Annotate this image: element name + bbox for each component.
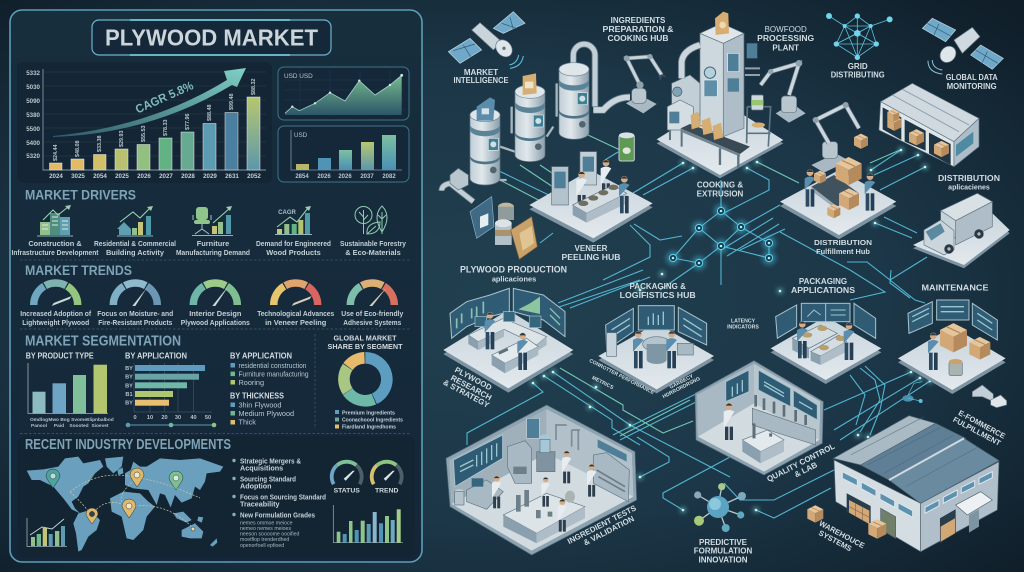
label: ingredients hub: COOKING HUB xyxy=(608,34,669,43)
bar chart: market size with CAGR: $78.33 xyxy=(163,120,169,136)
label: predictive formulation innovation xyxy=(694,538,752,565)
bar chart: market size with CAGR: $33.38 xyxy=(97,136,103,152)
bar chart: market size with CAGR: 2025 xyxy=(115,173,129,180)
list: recent developments: Strategic Mergers & xyxy=(240,456,301,465)
label: plywood production: aplicaciones xyxy=(492,275,536,284)
chart: global market share donut: Premium Ingredients xyxy=(342,410,395,416)
gauge: lightweight plywood: Increased Adoption of xyxy=(20,309,92,318)
chart: by product type: BY PRODUCT TYPE xyxy=(26,351,94,360)
label: cooking and extrusion: EXTRUSION xyxy=(697,190,744,199)
list: recent developments xyxy=(232,456,326,549)
label: plywood research and strategy: RESEARCH xyxy=(449,373,493,402)
driver: furniture manufacturing: Manufacturing Demand xyxy=(176,248,250,257)
gauge: moisture and fire resistant xyxy=(97,283,174,327)
icon: small link node xyxy=(902,382,923,403)
chart: USD area xyxy=(278,67,409,120)
gauge: interior design: Interior Design xyxy=(189,309,242,318)
bar chart: market size with CAGR: 2027 xyxy=(159,173,173,180)
label: plywood research and strategy: PLYWOOD xyxy=(453,365,493,392)
list: recent developments: Sourcing Standard xyxy=(240,474,296,483)
label: cooking and extrusion xyxy=(697,181,744,199)
label: maintenance: MAINTENANCE xyxy=(922,284,989,293)
driver: sustainable forestry xyxy=(340,206,407,257)
chart: by product type xyxy=(26,351,114,429)
bar chart: market size with CAGR: $88.32 xyxy=(251,78,257,95)
label: latency indicators: INDICATORS xyxy=(727,324,759,330)
bar chart: market size with CAGR: 2028 xyxy=(181,173,195,180)
label: veneer peeling hub: PEELING HUB xyxy=(562,253,621,262)
legend: by thickness: Medium Plywood xyxy=(238,409,294,418)
driver: residential and commercial xyxy=(94,206,176,257)
heading: market drivers: MARKET DRIVERS xyxy=(25,186,136,202)
bar chart: market size with CAGR: $99.48 xyxy=(229,94,235,110)
chart: by application: 20 xyxy=(161,415,168,421)
quality control lab room xyxy=(695,361,823,475)
label: warehouse systems: SYSTEMS xyxy=(817,528,853,553)
icon: predictive formulation molecule xyxy=(694,483,746,532)
green can xyxy=(619,132,634,161)
list: recent developments: Acquisitions xyxy=(240,464,283,473)
gauge: eco-friendly adhesive xyxy=(341,283,404,327)
label: packaging and logistics hub xyxy=(620,282,696,300)
list: recent developments: neeson soooome oooified xyxy=(240,532,300,538)
bar chart: market size with CAGR: $88.48 xyxy=(207,104,213,121)
bar chart: market size with CAGR: 2052 xyxy=(247,173,261,180)
robot arm: can handling xyxy=(751,60,806,123)
bar chart: market size with CAGR: 5400 xyxy=(26,140,41,147)
bar chart: market size with CAGR: $29.93 xyxy=(119,130,125,147)
list: recent developments: nemes ommoe meioce xyxy=(240,520,293,526)
list: recent developments: nemeo nemes meioes xyxy=(240,526,291,532)
label: distribution applications: aplicacienes xyxy=(948,184,990,192)
bar chart: market size with CAGR: 5380 xyxy=(26,112,41,119)
ingredient tests lab room xyxy=(446,405,637,555)
chart: by product type: Slipnbalbod xyxy=(86,417,114,423)
chart: global market share donut: Fiardland Ingredhoms xyxy=(342,425,396,431)
legend: by application: Furniture manufacturing xyxy=(238,370,308,379)
packaging applications hub xyxy=(771,303,881,384)
chart: by application: BY xyxy=(125,401,133,407)
driver: construction xyxy=(12,205,99,257)
tanks: processing line xyxy=(442,44,630,202)
chart: by application: BY xyxy=(125,383,133,389)
bar chart: market size with CAGR: $24.44 xyxy=(53,144,59,161)
chart: by product type: Omdlog xyxy=(30,417,48,423)
legend: by thickness: 3hin Flywood xyxy=(238,400,282,409)
heading: recent industry developments: RECENT INDUSTRY DEVELOPMENTS xyxy=(25,437,231,453)
label: performance metrics: CONROTTER PERFORMANCE xyxy=(588,358,655,396)
driver: engineered wood: CAGR xyxy=(278,210,296,216)
warehouse boxes xyxy=(807,505,886,539)
gauge: trend: TREND xyxy=(375,487,398,494)
label: performance metrics: METRICS xyxy=(591,375,615,391)
chart: USD bars: 2026 xyxy=(317,174,331,180)
packaging and logistics hub xyxy=(598,306,714,393)
bar chart: market size with CAGR: 5332 xyxy=(26,70,41,77)
warehouse xyxy=(833,416,999,552)
driver: construction: Construction & xyxy=(28,239,82,248)
label: predictive formulation innovation: FORMULATION xyxy=(694,546,752,556)
gauge: lightweight plywood xyxy=(20,283,92,327)
bar chart: market size with CAGR xyxy=(17,62,272,183)
chart: by application: 0 xyxy=(133,415,137,421)
label: plant: BOWFOOD xyxy=(765,25,807,34)
chart: USD bars: 2082 xyxy=(382,174,396,180)
driver: engineered wood xyxy=(256,206,331,257)
label: packaging applications xyxy=(791,277,856,295)
chart: by product type: Soooted xyxy=(69,423,89,429)
chart: by application: 50 xyxy=(205,415,211,421)
icon: grid distributing network xyxy=(826,13,893,60)
title xyxy=(92,20,331,55)
label: quality control and lab: & LAB xyxy=(793,460,819,479)
label: veneer peeling hub xyxy=(562,244,621,262)
fulfillment hub platform xyxy=(780,102,896,239)
bar chart: market size with CAGR: 5320 xyxy=(26,153,41,160)
chart: global market share donut: GLOBAL MARKET xyxy=(334,333,397,342)
list: recent developments: Focus on Sourcing Standard xyxy=(240,492,326,501)
bar chart: market size with CAGR: 3025 xyxy=(71,173,85,180)
label: packaging applications: APPLICATIONS xyxy=(791,286,856,295)
driver: furniture manufacturing: Furniture xyxy=(197,239,229,248)
label: e-commerce fulfilment: FULPILLMENT xyxy=(951,415,1003,448)
delivery truck xyxy=(913,193,1010,268)
legend: by application xyxy=(230,351,308,387)
storage container xyxy=(879,83,979,167)
list: recent developments: Traceability xyxy=(240,500,280,509)
label: plywood research and strategy: & STRATEGY xyxy=(442,378,491,410)
label: plant: PLANT xyxy=(772,44,799,53)
legend: by thickness xyxy=(230,391,294,427)
bar chart: market size with CAGR: $55.53 xyxy=(141,126,147,142)
gauge: veneer peeling: in Veneer Peeling xyxy=(265,318,327,327)
label: packaging and logistics hub: PACKAGING & xyxy=(630,282,686,291)
bar chart: market size with CAGR: 5500 xyxy=(26,126,41,133)
chart: by application: 40 xyxy=(190,415,197,421)
chart: by application: 10 xyxy=(147,415,153,421)
driver: residential and commercial: Residential & Commercial xyxy=(94,239,176,248)
satellite: global data monitoring xyxy=(922,18,1003,74)
bar chart: market size with CAGR: 2029 xyxy=(203,173,217,180)
chart: USD bars: USD xyxy=(294,132,308,139)
label: market intelligence: INTELLIGENCE xyxy=(454,76,509,85)
heading: market segmentation: MARKET SEGMENTATION xyxy=(25,333,181,350)
CAGR label: CAGR 5.8% xyxy=(133,78,196,116)
label: distribution applications xyxy=(938,174,1000,192)
label: packaging applications: PACKAGING xyxy=(799,277,847,286)
plywood research and strategy hub xyxy=(443,288,573,393)
label: veneer peeling hub: VENEER xyxy=(575,244,608,253)
chart: USD bars: 2854 xyxy=(295,174,309,180)
label: cooking and extrusion: COOKING & xyxy=(697,181,743,190)
chart: global market share donut xyxy=(328,333,403,431)
panel: market dashboard xyxy=(10,10,422,562)
label: garbecy: HDRRORDRSNG xyxy=(662,376,701,400)
label: plywood production: PLYWOOD PRODUCTION xyxy=(460,265,567,275)
chart: USD bars: 2037 xyxy=(360,174,374,180)
label: latency indicators xyxy=(727,319,759,330)
legend: by application: Rooring xyxy=(238,378,264,387)
gauge: lightweight plywood: Lightweight Plywood xyxy=(22,318,90,327)
label: warehouse systems: WAREHOUCE xyxy=(818,519,866,550)
label: predictive formulation innovation: PREDICTIVE xyxy=(699,538,748,547)
heading: market trends: MARKET TRENDS xyxy=(25,262,132,278)
label: fulfillment hub: Fulfillment Hub xyxy=(816,247,870,256)
gauge: trend xyxy=(372,462,402,494)
list: recent developments: New Formulation Grades xyxy=(240,510,315,519)
gauge: interior design: Plywood Applications xyxy=(181,318,250,327)
chart: USD bars xyxy=(278,126,409,182)
chart: by product type: Svome xyxy=(71,417,87,423)
bar chart: market size with CAGR: $48.08 xyxy=(75,140,81,157)
chart: USD bars: 2026 xyxy=(338,174,352,180)
chart: developments bars xyxy=(333,505,403,543)
driver: engineered wood: Demand for Engineered xyxy=(256,239,331,248)
chart: by product type: Mwo Bog xyxy=(48,417,70,423)
label: ingredient tests and validation: INGREDIENT TESTS xyxy=(566,503,638,546)
bar chart: market size with CAGR: 2024 xyxy=(49,173,63,180)
driver: engineered wood: Wood Products xyxy=(266,248,321,257)
gauge: interior design xyxy=(181,283,250,327)
label: distribution applications: DISTRIBUTION xyxy=(938,174,1000,183)
label: plywood research and strategy xyxy=(442,365,493,410)
driver: residential and commercial: Building Activity xyxy=(106,248,165,257)
gauge: moisture and fire resistant: Fire-Resistant Products xyxy=(98,318,172,327)
label: plywood production xyxy=(460,265,567,284)
label: market intelligence xyxy=(454,68,509,85)
chart: by application: B1 xyxy=(125,392,133,398)
gauge: eco-friendly adhesive: Adhesive Systems xyxy=(343,318,401,327)
bar chart: market size with CAGR: 5030 xyxy=(26,84,41,91)
products: bag and cans xyxy=(470,197,537,259)
chart: USD area: USD USD xyxy=(284,73,313,80)
label: fulfillment hub: DISTRIBUTION xyxy=(814,238,872,247)
label: grid distributing: GRID xyxy=(848,62,868,71)
processing plant machine xyxy=(657,12,783,178)
chart: by product type: Paid xyxy=(54,423,64,429)
chart: by application: BY APPLICATION xyxy=(125,351,187,360)
label: ingredients hub: PREPARATION & xyxy=(602,25,674,34)
list: recent developments: moetflop trenderdhed xyxy=(240,537,289,543)
gauge: status xyxy=(332,462,362,494)
data network lines xyxy=(467,135,933,518)
satellite: market intelligence xyxy=(448,12,525,68)
chart: by product type: Panool xyxy=(31,423,47,429)
label: ingredients hub: INGREDIENTS xyxy=(611,16,666,25)
driver: construction: Infrastructure Development xyxy=(12,248,99,257)
chart: by product type: Sioevet xyxy=(91,423,109,429)
chart: by application: 30 xyxy=(175,415,181,421)
label: global data monitoring: GLOBAL DATA xyxy=(946,73,998,82)
chart: global market share donut: Coonachoool Ingredients xyxy=(342,418,403,424)
label: predictive formulation innovation: INNOVATION xyxy=(698,556,748,565)
robot arm: ingredients xyxy=(624,54,666,113)
label: global data monitoring: MONITORING xyxy=(947,82,997,91)
gauge: eco-friendly adhesive: Use of Eco-friendly xyxy=(341,309,404,318)
gauge: veneer peeling: Technological Advances xyxy=(257,309,334,318)
driver: sustainable forestry: Sustainable Forestry xyxy=(340,239,407,248)
bar chart: market size with CAGR: 2026 xyxy=(137,173,151,180)
label: quality control and lab: QUALITY CONTROL xyxy=(765,442,836,484)
bar chart: market size with CAGR: 2631 xyxy=(225,173,239,180)
label: latency indicators: LATENCY xyxy=(731,319,756,325)
label: e-commerce fulfilment: E-FOMMERCE xyxy=(957,408,1007,441)
veneer peeling hub xyxy=(529,152,653,243)
legend: by application: residential construction xyxy=(238,361,306,370)
legend: by thickness: Thick xyxy=(238,418,256,427)
title: PLYWOOD MARKET xyxy=(105,24,318,50)
label: packaging and logistics hub: LOGIFISTICS HUB xyxy=(620,291,696,300)
list: recent developments: openorfoell epfioed xyxy=(240,543,284,549)
label: plant: PROCESSING xyxy=(757,34,814,43)
label: ingredient tests and validation: & VALIDATION xyxy=(582,514,636,547)
driver: furniture manufacturing xyxy=(176,206,250,257)
list: recent developments: Adoption xyxy=(240,482,272,491)
icon: small server units xyxy=(972,385,1007,408)
label: grid distributing: DISTRIBUTING xyxy=(831,71,885,80)
label: garbecy: GARBECY xyxy=(669,373,695,391)
gauge: moisture and fire resistant: Focus on Moisture- and xyxy=(97,309,174,318)
chart: by application: BY xyxy=(125,366,133,372)
chart: global market share donut: SHARE BY SEGMENT xyxy=(328,342,403,351)
label: market intelligence: MARKET xyxy=(464,68,498,77)
bar chart: market size with CAGR: $77.96 xyxy=(185,114,191,130)
label: fulfillment hub xyxy=(814,238,872,256)
world map xyxy=(27,457,223,552)
chart: mini growth xyxy=(27,518,67,546)
chart: by application: BY xyxy=(125,375,133,381)
bar chart: market size with CAGR: 5090 xyxy=(26,98,41,105)
label: plant xyxy=(757,25,814,53)
driver: sustainable forestry: & Eco-Materials xyxy=(345,248,401,257)
legend: by application: BY APPLICATION xyxy=(230,351,292,360)
label: ingredients hub xyxy=(602,16,674,43)
legend: by thickness: BY THICKNESS xyxy=(230,391,284,400)
arrow: growth curve xyxy=(53,68,246,137)
label: global data monitoring xyxy=(946,73,998,91)
label: grid distributing xyxy=(831,62,885,80)
maintenance hub xyxy=(898,300,1006,394)
gauge: status: STATUS xyxy=(334,487,360,494)
chart: by application xyxy=(125,351,216,427)
gauge: veneer peeling xyxy=(257,283,334,327)
bar chart: market size with CAGR: 2054 xyxy=(93,173,107,180)
